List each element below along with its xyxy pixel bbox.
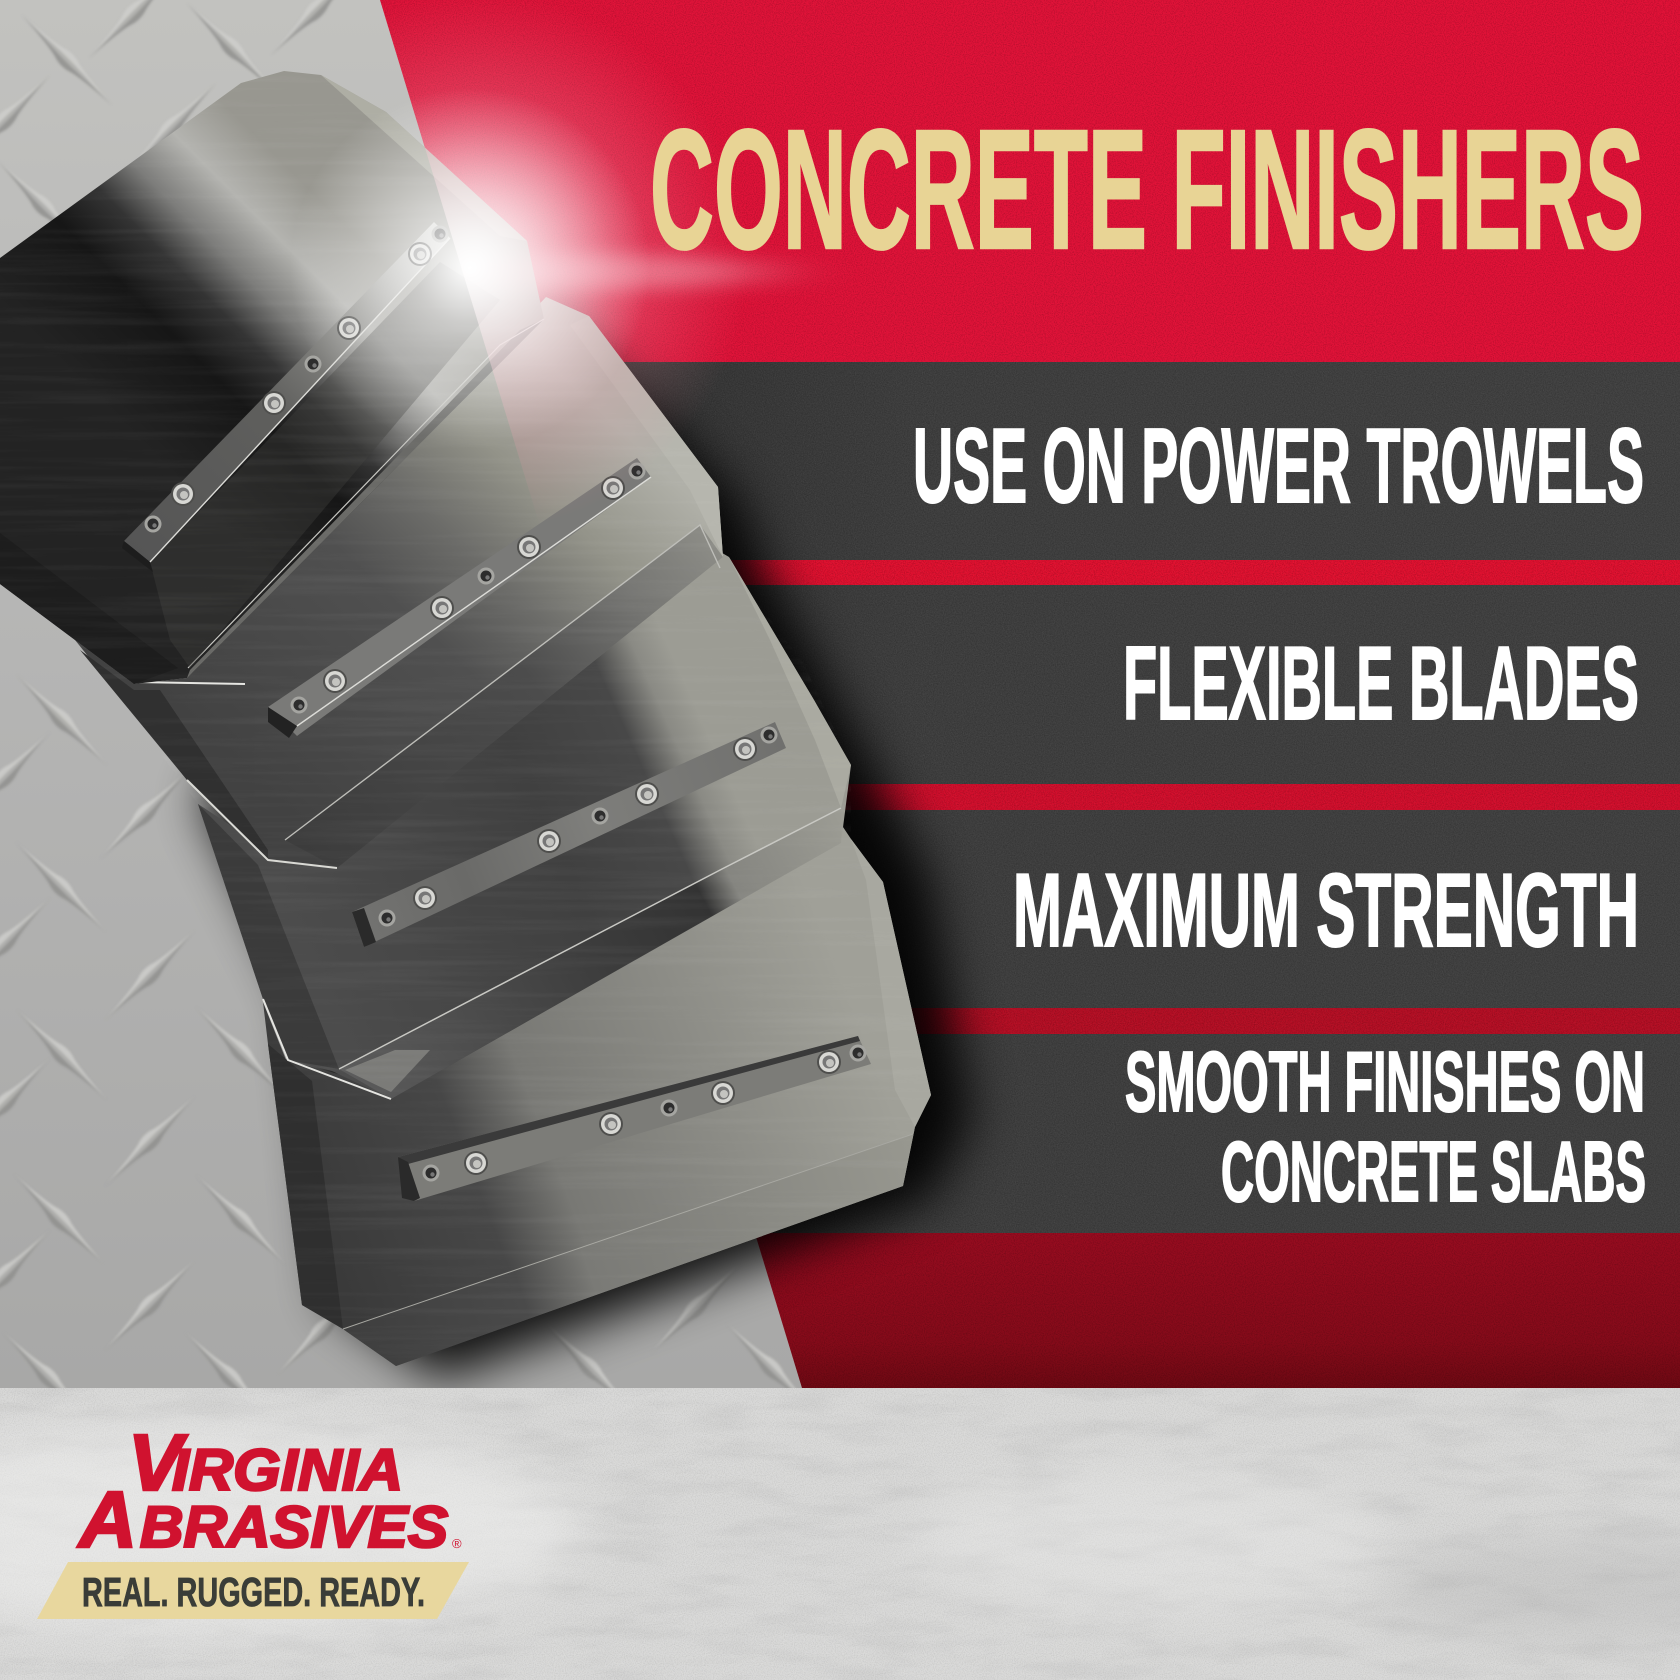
logo: Virginia Abrasives — [37, 1418, 469, 1619]
trowel cast shadow — [200, 300, 972, 1380]
blade 2 — [75, 297, 723, 868]
wordmark: ® — [452, 1536, 462, 1551]
mounting bar 2 — [268, 458, 651, 738]
wordmark: IRGINIA — [172, 1438, 403, 1503]
mounting bar 1 — [122, 222, 450, 572]
tagline text: REAL. RUGGED. READY. — [82, 1569, 425, 1615]
wordmark: V — [128, 1418, 188, 1507]
mounting bar 4 — [398, 1036, 871, 1201]
panel: concrete footer — [0, 1388, 1680, 1680]
tagline banner — [37, 1562, 469, 1619]
feature list — [913, 407, 1646, 1220]
wordmark — [77, 1418, 462, 1564]
mounting bar 3 — [352, 722, 786, 947]
wordmark: A — [77, 1475, 137, 1564]
product: four-blade concrete finisher trowel — [0, 71, 932, 1367]
blade 4 — [263, 800, 931, 1366]
brushed metal texture — [53, 269, 811, 1198]
blade 3 — [198, 540, 851, 1099]
feature: smooth finishes on concrete slabs — [1125, 1035, 1646, 1220]
panel: red and charcoal striped bands — [380, 0, 1680, 1388]
wordmark: BRASIVES — [140, 1495, 448, 1560]
light flare — [309, 19, 808, 490]
blade 1 — [0, 71, 544, 684]
